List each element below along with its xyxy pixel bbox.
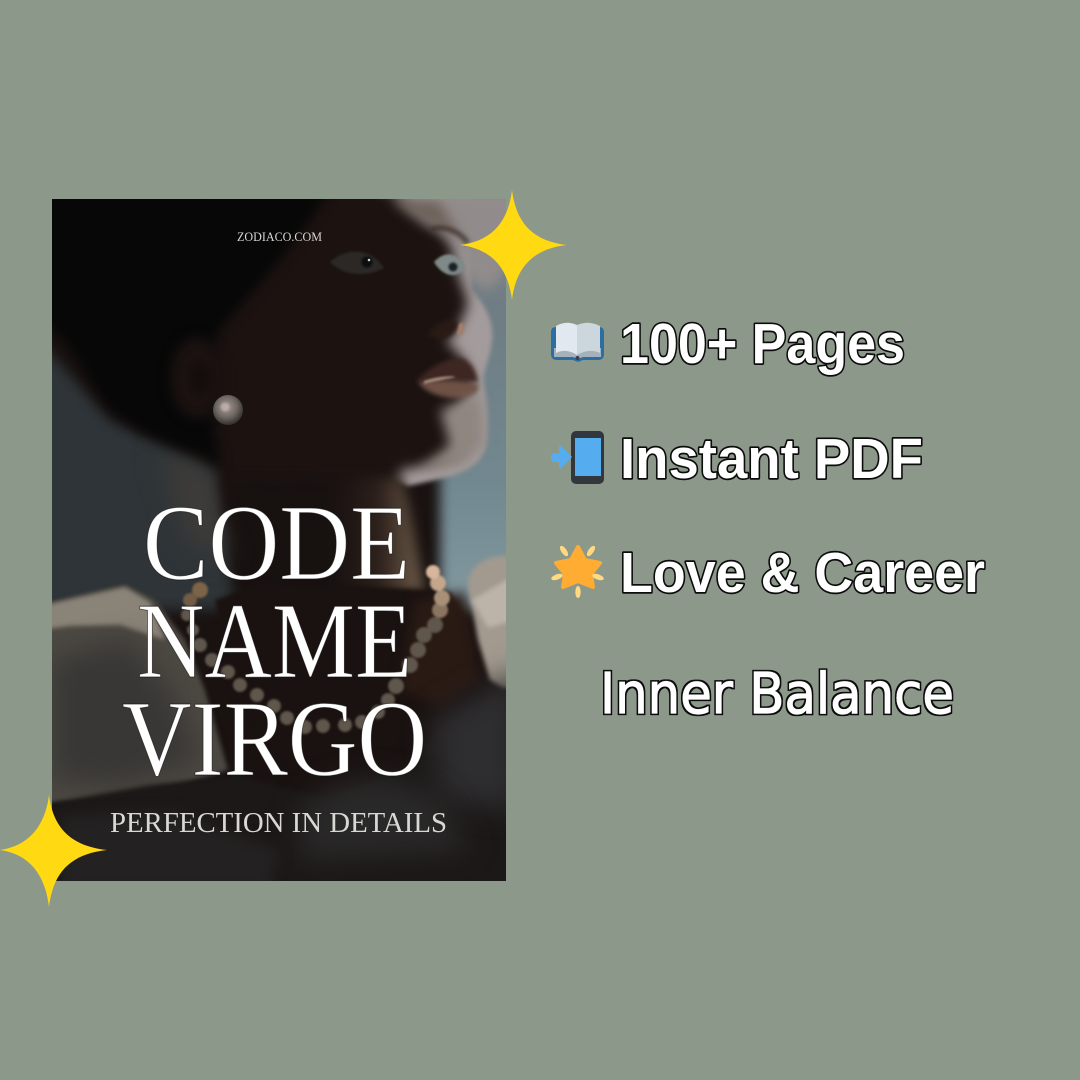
infographic canvas bbox=[0, 190, 986, 907]
title: Code Name Virgo: NAME bbox=[137, 582, 412, 701]
title: Code Name Virgo: VIRGO bbox=[122, 680, 427, 799]
list item: Instant PDF: Instant PDF bbox=[620, 427, 923, 491]
hair bbox=[52, 199, 325, 466]
icon: sparkle bottom bbox=[0, 795, 107, 907]
icon: sparkle top bbox=[460, 190, 567, 300]
earring bbox=[213, 395, 243, 425]
ear bbox=[170, 338, 214, 418]
panel: book cover poster bbox=[52, 199, 506, 881]
list item: 100+ Pages: 100+ Pages bbox=[620, 312, 905, 376]
far side mist and hair bbox=[444, 199, 506, 290]
lower fabric bbox=[52, 686, 506, 806]
icon: open book bbox=[551, 323, 604, 362]
neck bbox=[352, 474, 429, 592]
eyes and brow bbox=[330, 251, 384, 274]
chin light bbox=[420, 395, 484, 470]
poster photo: woman in profile with pearl necklace bbox=[52, 199, 506, 881]
pearl necklace bbox=[181, 565, 450, 734]
icon: glowing star bbox=[550, 545, 605, 598]
subtitle: PERFECTION IN DETAILS bbox=[110, 807, 447, 839]
list item: Love & Career: Love & Career bbox=[620, 541, 985, 605]
face in shadow bbox=[215, 190, 472, 520]
title: Code Name Virgo: CODE bbox=[143, 484, 410, 603]
list item: Inner Balance: Inner Balance bbox=[600, 662, 954, 727]
right cloth bbox=[466, 554, 506, 690]
text: publisher: ZODIACO.COM bbox=[237, 229, 322, 244]
lips bbox=[416, 358, 478, 382]
left backdrop bbox=[52, 349, 236, 614]
nose bbox=[428, 321, 458, 340]
left cloth bbox=[40, 585, 228, 805]
title: Code Name Virgo bbox=[122, 507, 424, 777]
icon: phone with arrow bbox=[551, 431, 604, 484]
lit rim of face bbox=[381, 199, 494, 489]
chest bbox=[214, 586, 456, 615]
forehead glow bbox=[390, 199, 462, 238]
